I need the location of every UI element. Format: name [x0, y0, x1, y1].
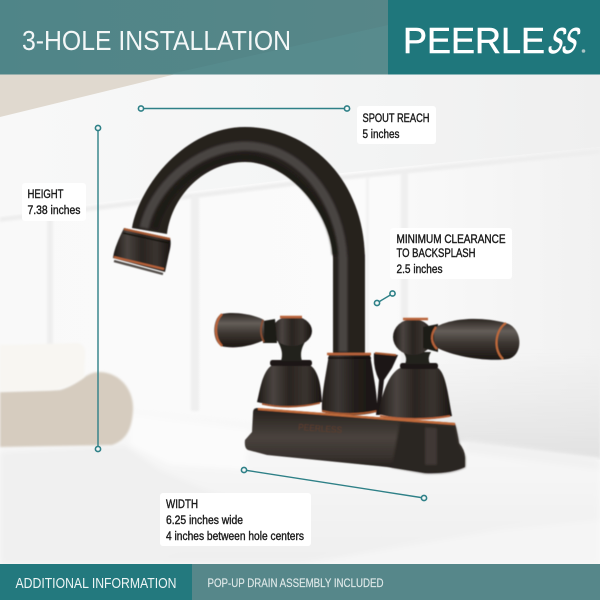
spout reach label [357, 106, 436, 144]
faucet [113, 127, 519, 473]
center collar [322, 354, 377, 416]
clearance label: MINIMUM CLEARANCE [396, 234, 506, 246]
clearance label: 2.5 inches [396, 264, 443, 276]
title: 3-HOLE INSTALLATION [22, 25, 291, 56]
width label: 6.25 inches wide [166, 515, 243, 527]
footer detail: POP-UP DRAIN ASSEMBLY INCLUDED [208, 578, 384, 590]
right handle [378, 319, 519, 420]
logo panel: PEERLE [403, 20, 545, 61]
spout [132, 127, 365, 354]
clearance dimension [374, 291, 395, 306]
height dimension [95, 125, 101, 452]
spout reach label: 5 inches [362, 129, 400, 141]
width label: 4 inches between hole centers [166, 531, 304, 543]
pop-up knob [374, 353, 398, 415]
footer band [0, 564, 600, 600]
base plate [245, 408, 465, 473]
width dimension [241, 467, 427, 501]
base plate: PEERLESS [298, 422, 342, 435]
clearance label: TO BACKSPLASH [396, 248, 476, 260]
clearance label [390, 228, 512, 279]
header band [0, 0, 600, 74]
height label: HEIGHT [28, 189, 64, 201]
height label: 7.38 inches [28, 205, 81, 217]
aerator [113, 228, 171, 274]
width label [160, 493, 311, 546]
spout reach label: SPOUT REACH [362, 113, 430, 125]
left handle [214, 313, 322, 407]
countertop [0, 408, 600, 564]
width label: WIDTH [166, 499, 198, 511]
height label [22, 183, 86, 221]
towel and soap [0, 343, 133, 447]
logo panel [388, 0, 600, 74]
spout reach dimension [138, 106, 350, 111]
footer heading: ADDITIONAL INFORMATION [16, 576, 176, 592]
